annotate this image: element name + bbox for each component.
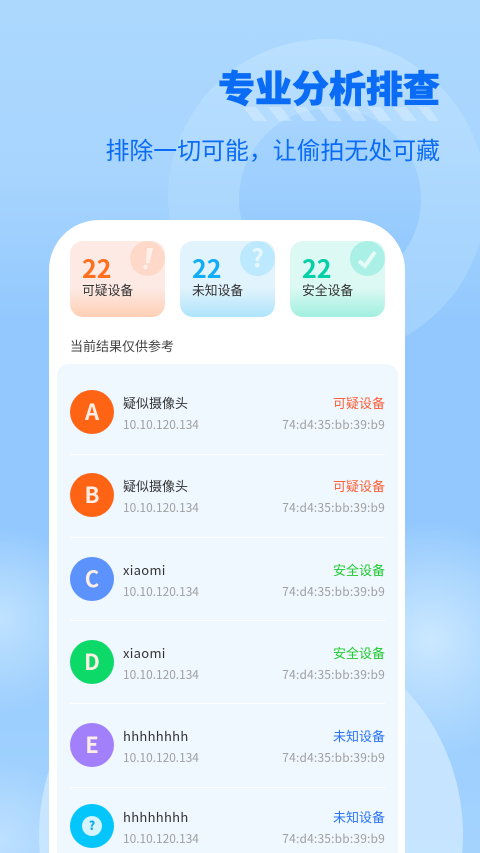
- avatar E: [70, 723, 114, 767]
- avatar D: [70, 640, 114, 684]
- avatar unknown: ?: [89, 817, 95, 834]
- avatar A: [70, 390, 114, 434]
- status: 安全设备: [333, 643, 385, 662]
- label: 未知设备: [192, 280, 243, 299]
- mac address: 74:d4:35:bb:39:b9: [282, 499, 385, 516]
- title decoration stripes: [243, 107, 439, 121]
- avatar A: A: [85, 395, 99, 427]
- title: 专业分析排查: [218, 59, 440, 113]
- avatar D: D: [84, 645, 100, 677]
- panel: phone card: [49, 220, 405, 853]
- label: 可疑设备: [82, 280, 133, 299]
- panel: stat suspicious: [70, 241, 165, 317]
- device name: hhhhhhhh: [123, 726, 189, 745]
- device name: hhhhhhhh: [123, 807, 189, 826]
- mac address: 74:d4:35:bb:39:b9: [282, 830, 385, 847]
- ip address: 10.10.120.134: [123, 666, 199, 683]
- status: 未知设备: [333, 726, 385, 745]
- number: 22: [82, 250, 112, 286]
- device name: xiaomi: [123, 560, 166, 579]
- device name: 疑似摄像头: [123, 393, 188, 412]
- avatar C: [70, 557, 114, 601]
- device row B: [70, 473, 385, 517]
- device row D: [70, 640, 385, 684]
- device row C: [70, 557, 385, 601]
- mac address: 74:d4:35:bb:39:b9: [282, 749, 385, 766]
- ip address: 10.10.120.134: [123, 583, 199, 600]
- label: 安全设备: [302, 280, 353, 299]
- icon: exclamation: [130, 241, 165, 276]
- icon: question mark: [240, 241, 275, 276]
- subtitle: 排除一切可能，让偷拍无处可藏: [106, 131, 440, 166]
- device name: xiaomi: [123, 643, 166, 662]
- ip address: 10.10.120.134: [123, 499, 199, 516]
- ip address: 10.10.120.134: [123, 830, 199, 847]
- device name: 疑似摄像头: [123, 476, 188, 495]
- mac address: 74:d4:35:bb:39:b9: [282, 583, 385, 600]
- icon: check: [350, 241, 385, 276]
- device row E: [70, 723, 385, 767]
- panel: device list: [57, 364, 398, 853]
- ip address: 10.10.120.134: [123, 416, 199, 433]
- status: 可疑设备: [333, 476, 385, 495]
- avatar unknown: [70, 804, 114, 848]
- ip address: 10.10.120.134: [123, 749, 199, 766]
- device row A: [70, 390, 385, 434]
- avatar B: B: [84, 478, 99, 510]
- avatar B: [70, 473, 114, 517]
- panel: stat safe: [290, 241, 385, 317]
- avatar E: E: [85, 728, 99, 760]
- status: 安全设备: [333, 560, 385, 579]
- device row F: [70, 804, 385, 848]
- mac address: 74:d4:35:bb:39:b9: [282, 666, 385, 683]
- number: 22: [302, 250, 332, 286]
- note text: 当前结果仅供参考: [70, 336, 174, 355]
- panel: stat unknown: [180, 241, 275, 317]
- mac address: 74:d4:35:bb:39:b9: [282, 416, 385, 433]
- number: 22: [192, 250, 222, 286]
- avatar C: C: [85, 562, 99, 594]
- status: 可疑设备: [333, 393, 385, 412]
- status: 未知设备: [333, 807, 385, 826]
